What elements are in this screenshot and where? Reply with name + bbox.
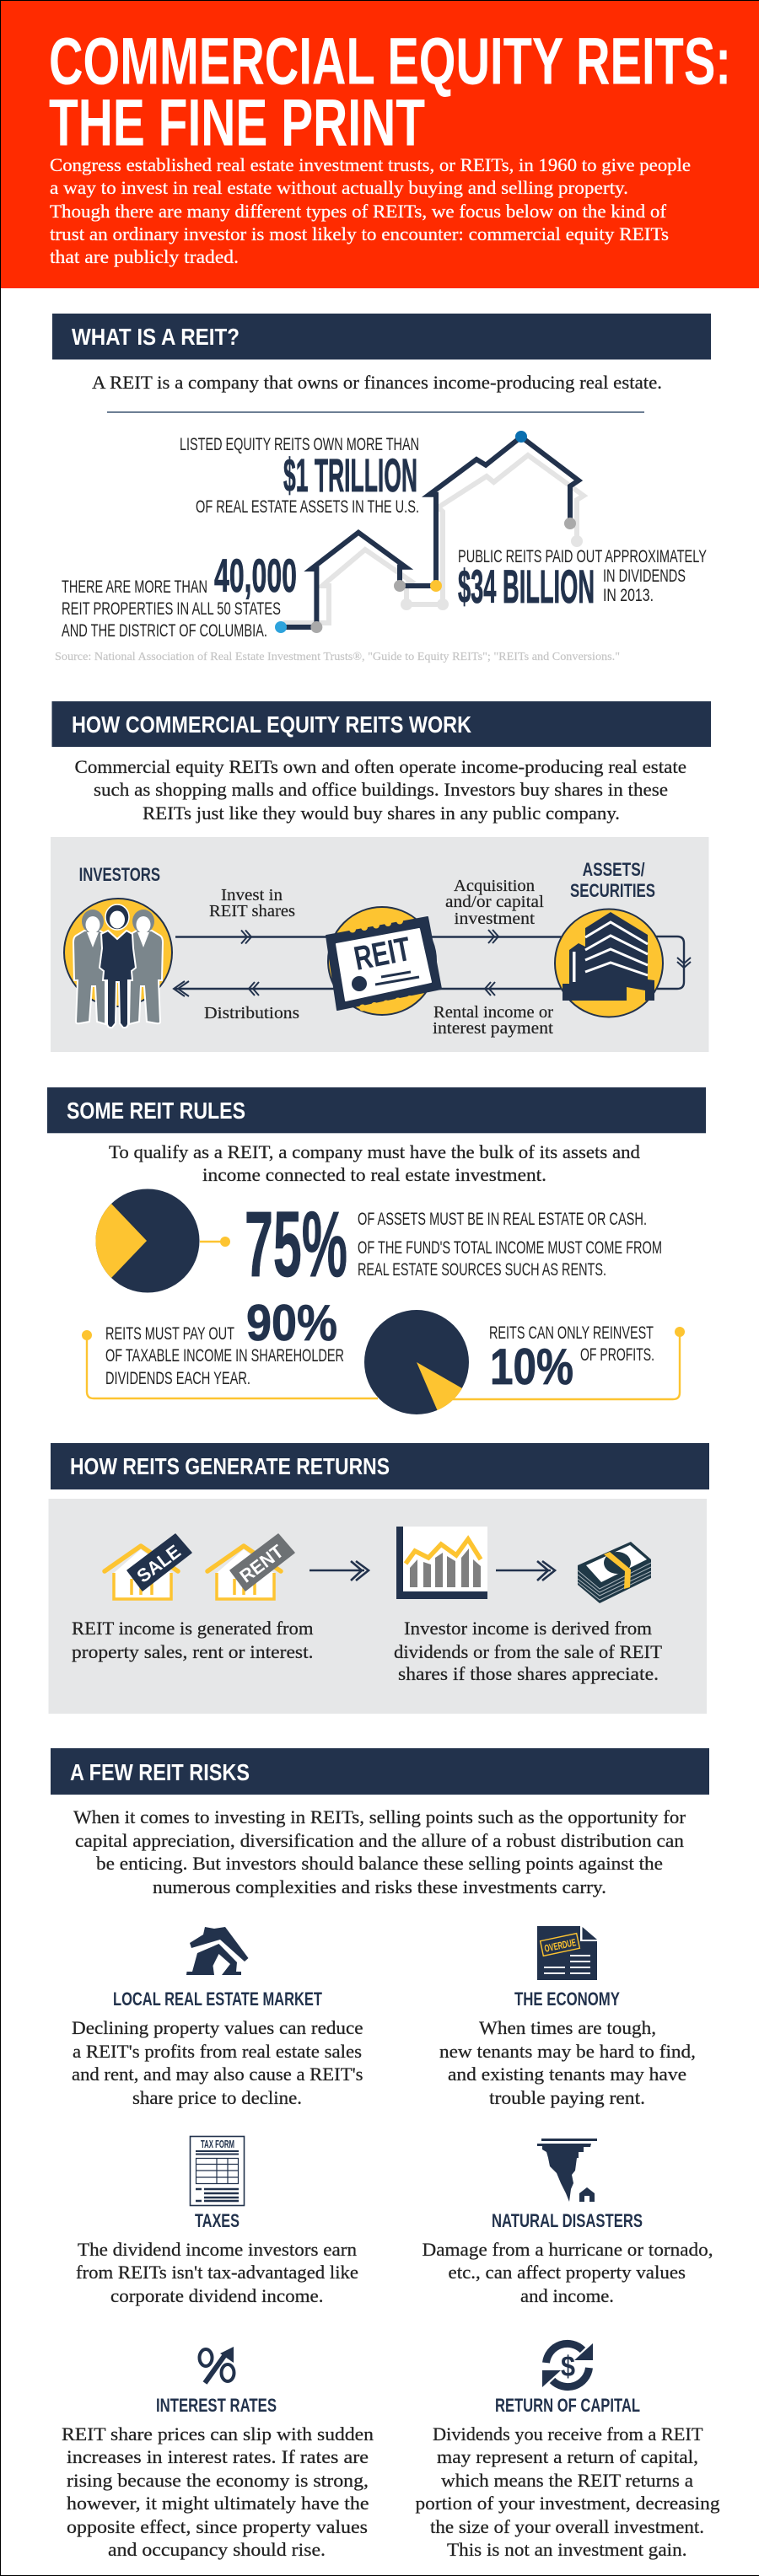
- icon: REIT certificate: [326, 907, 441, 1015]
- text: share price to decline.: [132, 2087, 302, 2108]
- text: increases in interest rates. If rates are: [67, 2446, 369, 2467]
- panel: returns: [49, 1499, 707, 1714]
- text: and rent, and may also cause a REIT's: [72, 2063, 363, 2085]
- stat: 40,000 properties: [62, 549, 297, 641]
- icon: investors: [64, 899, 172, 1028]
- text: and income.: [520, 2285, 614, 2306]
- text: portion of your investment, decreasing: [415, 2493, 720, 2514]
- stat: 40,000 properties: AND THE DISTRICT OF COLUMBIA.: [62, 620, 267, 641]
- heading: LOCAL REAL ESTATE MARKET: [113, 1988, 322, 2010]
- text: [72, 2017, 363, 2108]
- text: investor income: shares if those shares appreciate.: [398, 1663, 659, 1684]
- icon: tax form: TAX FORM: [201, 2138, 234, 2150]
- panel: local real estate market: [72, 1927, 363, 2108]
- label: acquisition: investment: [454, 910, 535, 928]
- heading: INTEREST RATES: [156, 2395, 277, 2416]
- text: qualification: income connected to real estate investment.: [202, 1164, 546, 1185]
- icon: rent house: RENT: [235, 1540, 288, 1586]
- text: how REITs work: REITs just like they would buy shares in any public company.: [143, 802, 620, 824]
- heading: NATURAL DISASTERS: [492, 2210, 643, 2231]
- infographic: $1 TRILLION: [283, 448, 417, 502]
- connector line: [82, 1327, 685, 1399]
- text: how REITs work: Commercial equity REITs own and often operate income-producing real estate: [74, 756, 686, 777]
- stat: 40,000 properties: REIT PROPERTIES IN ALL 50 STATES: [62, 598, 281, 619]
- heading: THE ECONOMY: [514, 1988, 620, 2010]
- stat: 75%: REAL ESTATE SOURCES SUCH AS RENTS.: [358, 1259, 606, 1280]
- heading: what is a REIT: WHAT IS A REIT?: [72, 324, 240, 350]
- stat: 90%: 90%: [246, 1295, 337, 1351]
- heading: TAXES: [195, 2210, 240, 2231]
- icon: REIT certificate: REIT: [351, 931, 413, 978]
- label: assets securities: ASSETS/: [583, 859, 645, 880]
- stat: 75%: 75%: [245, 1193, 347, 1296]
- icon: sale house: SALE: [132, 1541, 185, 1586]
- chart: 10% pie: [364, 1310, 469, 1414]
- intro text: a way to invest in real estate without actually buying and selling property.: [50, 177, 628, 198]
- text: investor income: dividends or from the sale of REIT: [394, 1641, 663, 1662]
- stat: 34 billion: $34 BILLION: [458, 560, 595, 613]
- icon: tornado: [537, 2139, 597, 2202]
- text: new tenants may be hard to find,: [439, 2041, 696, 2062]
- heading: how commercial equity REITs work: [52, 701, 711, 747]
- stat: 90%: [105, 1295, 344, 1388]
- icon: line chart: [396, 1527, 487, 1599]
- text: etc., can affect property values: [449, 2262, 686, 2283]
- text: When times are tough,: [479, 2017, 656, 2038]
- intro text: trust an ordinary investor is most likely to encounter: commercial equity REITs: [50, 223, 669, 244]
- heading: RETURN OF CAPITAL: [495, 2395, 640, 2416]
- text: REIT share prices can slip with sudden: [62, 2423, 374, 2445]
- text: how REITs work: [74, 756, 686, 824]
- label: investors: INVESTORS: [79, 864, 160, 885]
- icon: return arrows: $: [561, 2351, 575, 2383]
- heading: some REIT rules: SOME REIT RULES: [67, 1097, 245, 1124]
- stat: 90%: DIVIDENDS EACH YEAR.: [105, 1368, 250, 1388]
- text: opposite effect, since property values: [67, 2516, 368, 2537]
- text: Declining property values can reduce: [72, 2017, 363, 2038]
- text: corporate dividend income.: [110, 2285, 324, 2306]
- intro text: [50, 154, 691, 267]
- arrow: [496, 1561, 555, 1580]
- heading: how commercial equity REITs work: HOW COMMERCIAL EQUITY REITS WORK: [72, 711, 471, 738]
- label: acquisition: and/or capital: [445, 893, 544, 911]
- text: from REITs isn't tax-advantaged like: [76, 2262, 358, 2283]
- icon: percent arrow: [199, 2347, 234, 2383]
- icon: falling house: [186, 1927, 248, 1975]
- text: a REIT's profits from real estate sales: [73, 2041, 362, 2062]
- stat: 34 billion: IN DIVIDENDS: [603, 566, 686, 586]
- text: [422, 2239, 713, 2306]
- text: REIT income: property sales, rent or interest.: [72, 1641, 314, 1662]
- stat: 1 trillion: LISTED EQUITY REITS OWN MORE THAN: [180, 434, 419, 454]
- label: invest in REIT shares: [209, 886, 295, 920]
- text: REIT definition: A REIT is a company that owns or finances income-producing real estate.: [92, 372, 662, 393]
- stat: 90%: OF TAXABLE INCOME IN SHAREHOLDER: [105, 1345, 344, 1366]
- stat: 10%: 10%: [490, 1339, 573, 1395]
- label: distributions: Distributions: [204, 1004, 299, 1022]
- label: invest in REIT shares: REIT shares: [209, 902, 295, 920]
- heading: a few REIT risks: A FEW REIT RISKS: [70, 1759, 250, 1785]
- text: investor income: [394, 1618, 663, 1684]
- header panel: [0, 0, 759, 288]
- text: [415, 2423, 720, 2560]
- text: how REITs work: such as shopping malls and office buildings. Investors buy shares in these: [94, 779, 668, 800]
- text: and occupancy should rise.: [108, 2539, 326, 2560]
- heading: a few REIT risks: [51, 1748, 709, 1795]
- chart: house line graphic: [275, 431, 584, 633]
- heading: how REITs generate returns: [51, 1443, 709, 1489]
- panel: the economy: [439, 1926, 696, 2108]
- text: however, it might ultimately have the: [67, 2493, 369, 2514]
- stat: 75%: [245, 1193, 662, 1296]
- text: [439, 2017, 696, 2108]
- source note: Source: National Association of Real Estate Investment Trusts®, "Guide to Equity REITs"; "REITs and Conversions.": [55, 650, 620, 663]
- label: acquisition: [445, 877, 544, 928]
- flow lines and arrows: [174, 930, 691, 996]
- text: may represent a return of capital,: [437, 2446, 698, 2467]
- heading: some REIT rules: [47, 1087, 706, 1133]
- text: [62, 2423, 374, 2560]
- heading: what is a REIT: [52, 314, 711, 359]
- panel: natural disasters: [422, 2139, 713, 2306]
- text: the size of your overall investment.: [430, 2516, 704, 2537]
- person: centre woman: [100, 904, 136, 1028]
- panel: return of capital: [415, 2343, 720, 2560]
- person: left man: [73, 910, 105, 1024]
- icon: overdue notice: [537, 1926, 597, 1980]
- text: risks intro: [73, 1806, 686, 1897]
- chart: 75% pie: [95, 1189, 230, 1293]
- stat: 40,000 properties: 40,000: [214, 549, 297, 602]
- text: REIT income: [72, 1618, 314, 1662]
- panel: taxes: [76, 2136, 358, 2306]
- text: REIT income: REIT income is generated from: [72, 1618, 314, 1639]
- panel: flow diagram: [51, 837, 708, 1052]
- text: This is not an investment gain.: [447, 2539, 686, 2560]
- title: THE FINE PRINT: [49, 84, 425, 160]
- stat: 1 trillion: [180, 434, 419, 517]
- intro text: Congress established real estate investment trusts, or REITs, in 1960 to give people: [50, 154, 691, 175]
- label: invest in REIT shares: Invest in: [221, 886, 283, 904]
- panel: interest rates: [62, 2347, 374, 2560]
- text: risks intro: be enticing. But investors should balance these selling points against the: [96, 1853, 663, 1874]
- icon: building: [555, 909, 663, 1017]
- text: Damage from a hurricane or tornado,: [422, 2239, 713, 2260]
- text: rising because the economy is strong,: [67, 2470, 369, 2491]
- text: Dividends you receive from a REIT: [433, 2423, 703, 2445]
- label: rental income: interest payment: [433, 1019, 553, 1038]
- label: rental income: [433, 1003, 553, 1038]
- label: assets securities: [570, 859, 655, 901]
- icon: money stack: [578, 1542, 651, 1603]
- icon: overdue notice: OVERDUE: [543, 1936, 577, 1955]
- text: [76, 2239, 358, 2306]
- text: investor income: Investor income is derived from: [404, 1618, 652, 1639]
- stat: 34 billion: IN 2013.: [603, 585, 654, 605]
- arrow: [310, 1561, 369, 1580]
- stat: 90%: REITS MUST PAY OUT: [105, 1323, 234, 1344]
- stat: 1 trillion: OF REAL ESTATE ASSETS IN THE U.S.: [196, 496, 419, 517]
- person: right man: [129, 910, 163, 1024]
- text: and existing tenants may have: [448, 2063, 686, 2085]
- intro text: Though there are many different types of REITs, we focus below on the kind of: [50, 201, 667, 222]
- text: The dividend income investors earn: [78, 2239, 357, 2260]
- icon: tax form: [191, 2136, 245, 2205]
- text: which means the REIT returns a: [441, 2470, 693, 2491]
- text: risks intro: capital appreciation, diversification and the allure of a robust distribution can: [75, 1830, 684, 1851]
- stat: 10%: [489, 1323, 654, 1395]
- stat: 10%: OF PROFITS.: [580, 1344, 654, 1365]
- icon: return arrows: [542, 2343, 593, 2387]
- icon: sale house: [105, 1534, 191, 1599]
- stat: 10%: REITS CAN ONLY REINVEST: [489, 1323, 654, 1343]
- title: [49, 24, 731, 160]
- text: risks intro: When it comes to investing in REITs, selling points such as the opportunity for: [73, 1806, 686, 1827]
- label: acquisition: Acquisition: [454, 877, 535, 895]
- text: qualification: To qualify as a REIT, a company must have the bulk of its assets and: [109, 1141, 640, 1162]
- text: trouble paying rent.: [489, 2087, 645, 2108]
- label: rental income: Rental income or: [433, 1003, 553, 1022]
- intro text: that are publicly traded.: [50, 246, 239, 267]
- heading: how REITs generate returns: HOW REITS GENERATE RETURNS: [70, 1453, 390, 1479]
- text: qualification: [109, 1141, 640, 1185]
- icon: rent house: [207, 1534, 294, 1599]
- text: risks intro: numerous complexities and risks these investments carry.: [153, 1876, 606, 1897]
- stat: 40,000 properties: THERE ARE MORE THAN: [62, 577, 207, 597]
- label: assets securities: SECURITIES: [570, 880, 655, 901]
